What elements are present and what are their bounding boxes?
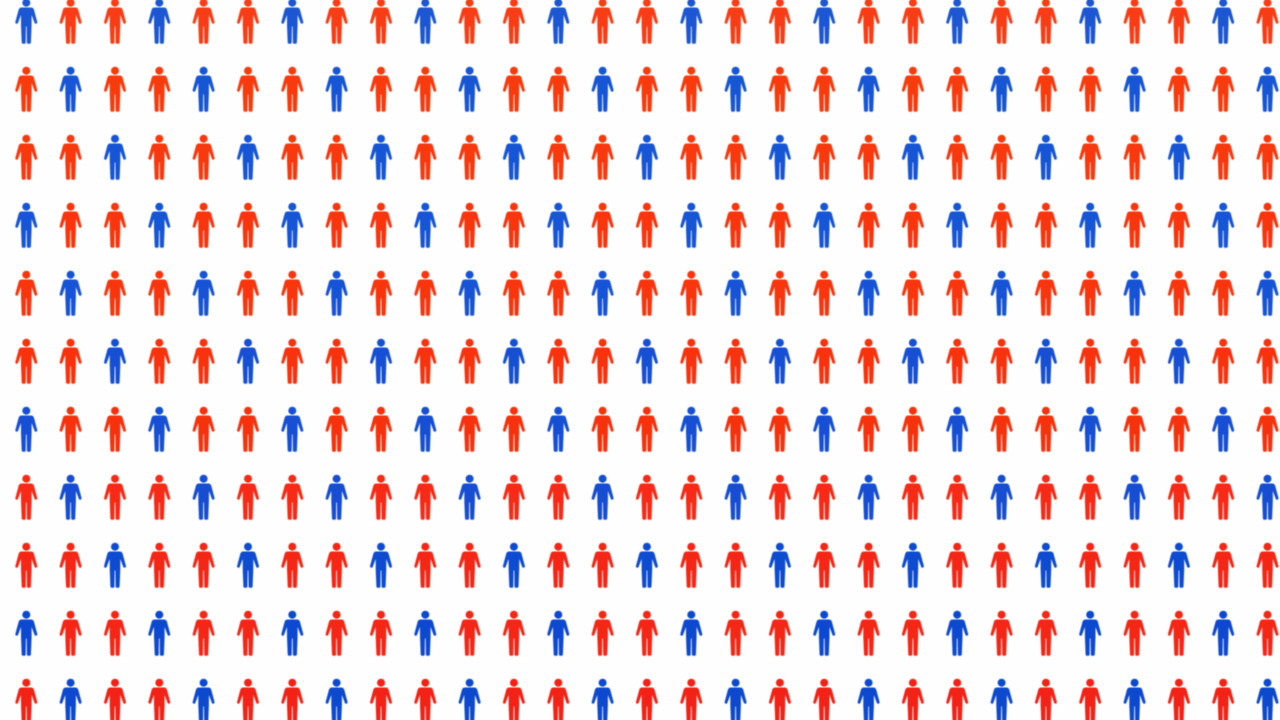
row 1 of people [15, 0, 1279, 44]
row 11 of people [15, 679, 1279, 720]
row 7 of people [15, 407, 1279, 452]
row 5 of people [15, 271, 1279, 316]
row 3 of people [15, 135, 1279, 180]
row 4 of people [15, 203, 1279, 248]
row 10 of people [15, 611, 1279, 656]
row 9 of people [15, 543, 1279, 588]
row 8 of people [15, 475, 1279, 520]
row 2 of people [15, 67, 1279, 112]
row 6 of people [15, 339, 1279, 384]
